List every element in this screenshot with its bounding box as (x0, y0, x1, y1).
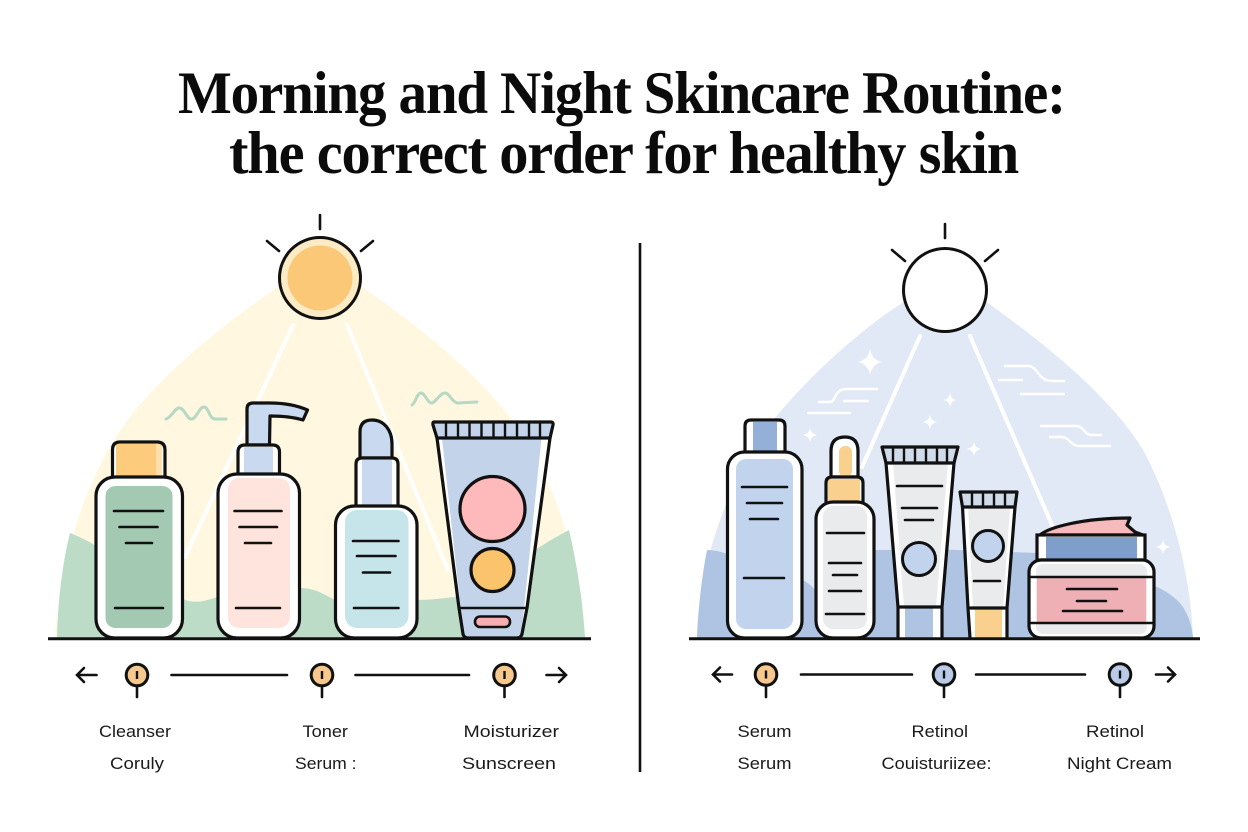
labels: night: Serum (738, 754, 792, 773)
labels: morning: Moisturizer (464, 722, 559, 741)
sparkles (803, 349, 1170, 554)
title (178, 60, 1065, 186)
labels: morning: Serum : (295, 754, 356, 773)
labels: night: Couisturiizee: (882, 754, 992, 773)
product: sunscreen tube (433, 422, 553, 638)
labels: night: Serum (738, 722, 792, 741)
timeline: night (713, 664, 1175, 697)
labels: night: Retinol (1086, 722, 1144, 741)
product: toner pump bottle (218, 403, 308, 638)
marker: retinol (933, 664, 955, 697)
labels: night (738, 722, 1172, 773)
icon: right squiggle (412, 393, 477, 405)
labels: morning: Coruly (110, 754, 165, 773)
product: cleanser bottle (96, 442, 182, 638)
marker: serum (755, 664, 777, 697)
labels: morning: Toner (302, 722, 348, 741)
marker: night cream (1109, 664, 1131, 697)
labels: morning (99, 722, 559, 773)
center divider (639, 243, 641, 772)
morning background dome (55, 287, 585, 638)
shelf: night (689, 637, 1200, 640)
title: Morning and Night Skincare Routine: (178, 60, 1065, 126)
marker: cleanser (126, 664, 148, 697)
icon: sun (267, 215, 373, 318)
labels: morning: Cleanser (99, 722, 171, 741)
panel: morning routine (48, 215, 591, 773)
product: retinol tube (882, 447, 958, 638)
product: night serum bottle (728, 420, 802, 638)
product: night dropper bottle (816, 437, 874, 638)
title: the correct order for healthy skin (229, 120, 1019, 186)
timeline: morning (77, 664, 566, 697)
product: small night tube (960, 492, 1017, 638)
icon: left squiggle (166, 407, 226, 419)
marker: toner (311, 664, 333, 697)
labels: night: Retinol (912, 722, 968, 741)
marker: moisturizer (494, 664, 515, 697)
icon: moon sun outline (892, 224, 998, 332)
labels: morning: Sunscreen (462, 754, 556, 773)
product: night cream jar (1029, 518, 1154, 638)
wind lines (808, 366, 1110, 446)
night background dome (697, 301, 1193, 638)
panel: night routine (689, 224, 1200, 773)
labels: night: Night Cream (1067, 754, 1172, 773)
shelf: morning (48, 637, 591, 640)
product: serum dropper bottle (336, 420, 417, 638)
